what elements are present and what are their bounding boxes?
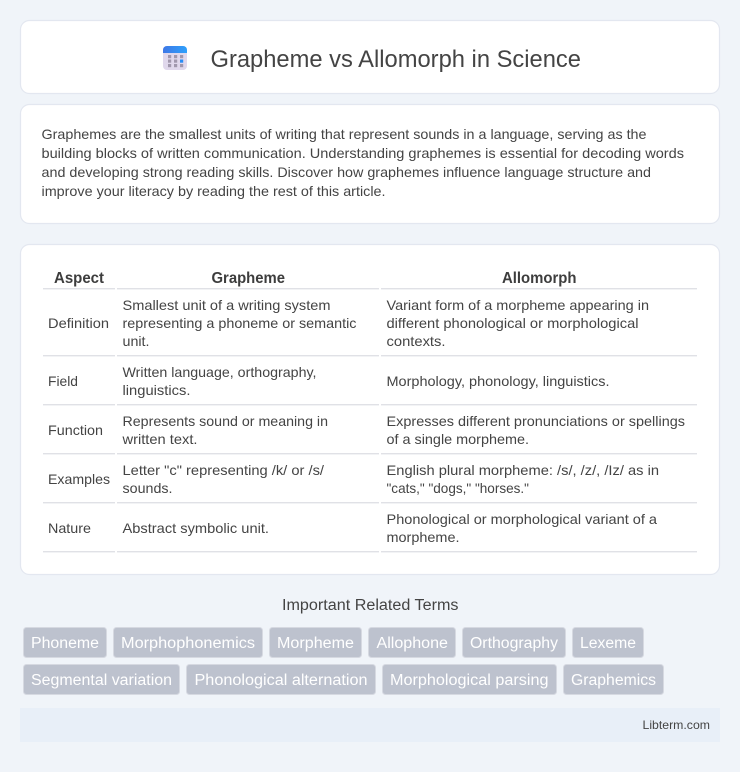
icon: calendar grid	[163, 46, 187, 70]
row: definition: Definition	[48, 315, 109, 331]
tag: Phonological alternation	[186, 664, 376, 694]
related term tags	[24, 628, 664, 694]
row: examples: Letter "c" representing /k/ or /s/	[122, 462, 324, 478]
tag: Morphophonemics: Morphophonemics	[121, 635, 255, 652]
row: function: written text.	[121, 431, 198, 447]
heading: important related terms: Important Related Terms	[282, 597, 459, 614]
tag: Phonological alternation: Phonological alternation	[194, 672, 368, 689]
tag: Allophone	[368, 628, 456, 658]
table header	[43, 270, 697, 289]
row: examples: Examples	[48, 471, 110, 487]
tag: Lexeme: Lexeme	[580, 635, 636, 652]
row: definition: unit.	[122, 333, 150, 349]
tag: Morphological parsing	[382, 664, 556, 694]
intro text: improve your literacy by reading the rest of this article.	[42, 183, 386, 199]
row: definition: Smallest unit of a writing system	[122, 297, 330, 313]
intro text: and developing strong reading skills. Discover how graphemes influence language structure and	[42, 164, 651, 180]
table header: Grapheme	[212, 270, 285, 287]
tag: Morpheme	[270, 628, 362, 658]
row: function: of a single morpheme.	[386, 431, 529, 447]
row: definition	[43, 297, 697, 356]
row: field: linguistics.	[122, 382, 190, 398]
row: nature: morpheme.	[386, 529, 460, 545]
row: examples: sounds.	[122, 480, 172, 496]
row: field: Written language, orthography,	[122, 364, 316, 380]
table header: Aspect	[54, 270, 104, 287]
row: field	[43, 364, 697, 405]
intro text	[42, 126, 684, 199]
footer credit: Libterm.com	[642, 718, 710, 732]
tag: Morphological parsing: Morphological parsing	[390, 672, 548, 689]
tag: Graphemics	[564, 664, 664, 694]
row: nature: Nature	[48, 520, 91, 536]
tag: Segmental variation: Segmental variation	[31, 672, 172, 689]
tag: Lexeme	[572, 628, 644, 658]
tag: Graphemics: Graphemics	[571, 672, 656, 689]
panel: header	[20, 20, 720, 94]
intro text: building blocks of written communication. Understanding graphemes is essential for decoding words	[42, 145, 684, 161]
tag: Morphophonemics	[114, 628, 262, 658]
row: examples	[43, 462, 697, 503]
footer band	[20, 708, 720, 742]
row: field: Field	[48, 373, 78, 389]
intro text: Graphemes are the smallest units of writing that represent sounds in a language, serving as the	[42, 126, 647, 142]
row: function: Expresses different pronunciations or spellings	[386, 413, 685, 429]
row: definition: different phonological or morphological	[386, 315, 638, 331]
table header: Allomorph	[502, 270, 576, 287]
tag: Phoneme: Phoneme	[31, 635, 99, 652]
tag: Orthography	[462, 628, 566, 658]
row: nature: Abstract symbolic unit.	[122, 520, 269, 536]
row: function: Represents sound or meaning in	[122, 413, 328, 429]
row: function	[43, 413, 697, 454]
row: nature: Phonological or morphological variant of a	[386, 511, 657, 527]
row: function: Function	[48, 422, 103, 438]
row: nature	[43, 511, 697, 552]
tag: Morpheme: Morpheme	[277, 635, 354, 652]
tag: Orthography: Orthography	[470, 635, 558, 652]
row: definition: representing a phoneme or semantic	[122, 315, 356, 331]
row: definition: Variant form of a morpheme appearing in	[386, 297, 649, 313]
tag: Allophone: Allophone	[376, 635, 448, 652]
row: examples: English plural morpheme: /s/, /z/, /Iz/ as in	[386, 462, 659, 478]
row: definition: contexts.	[386, 333, 446, 349]
panel: introduction	[20, 104, 720, 224]
row: field: Morphology, phonology, linguistics.	[386, 373, 610, 389]
panel: comparison table	[20, 244, 720, 574]
tag: Segmental variation	[24, 664, 180, 694]
tag: Phoneme	[24, 628, 106, 658]
title: Grapheme vs Allomorph in Science	[210, 46, 581, 73]
row: examples: "cats," "dogs," "horses."	[386, 480, 529, 496]
